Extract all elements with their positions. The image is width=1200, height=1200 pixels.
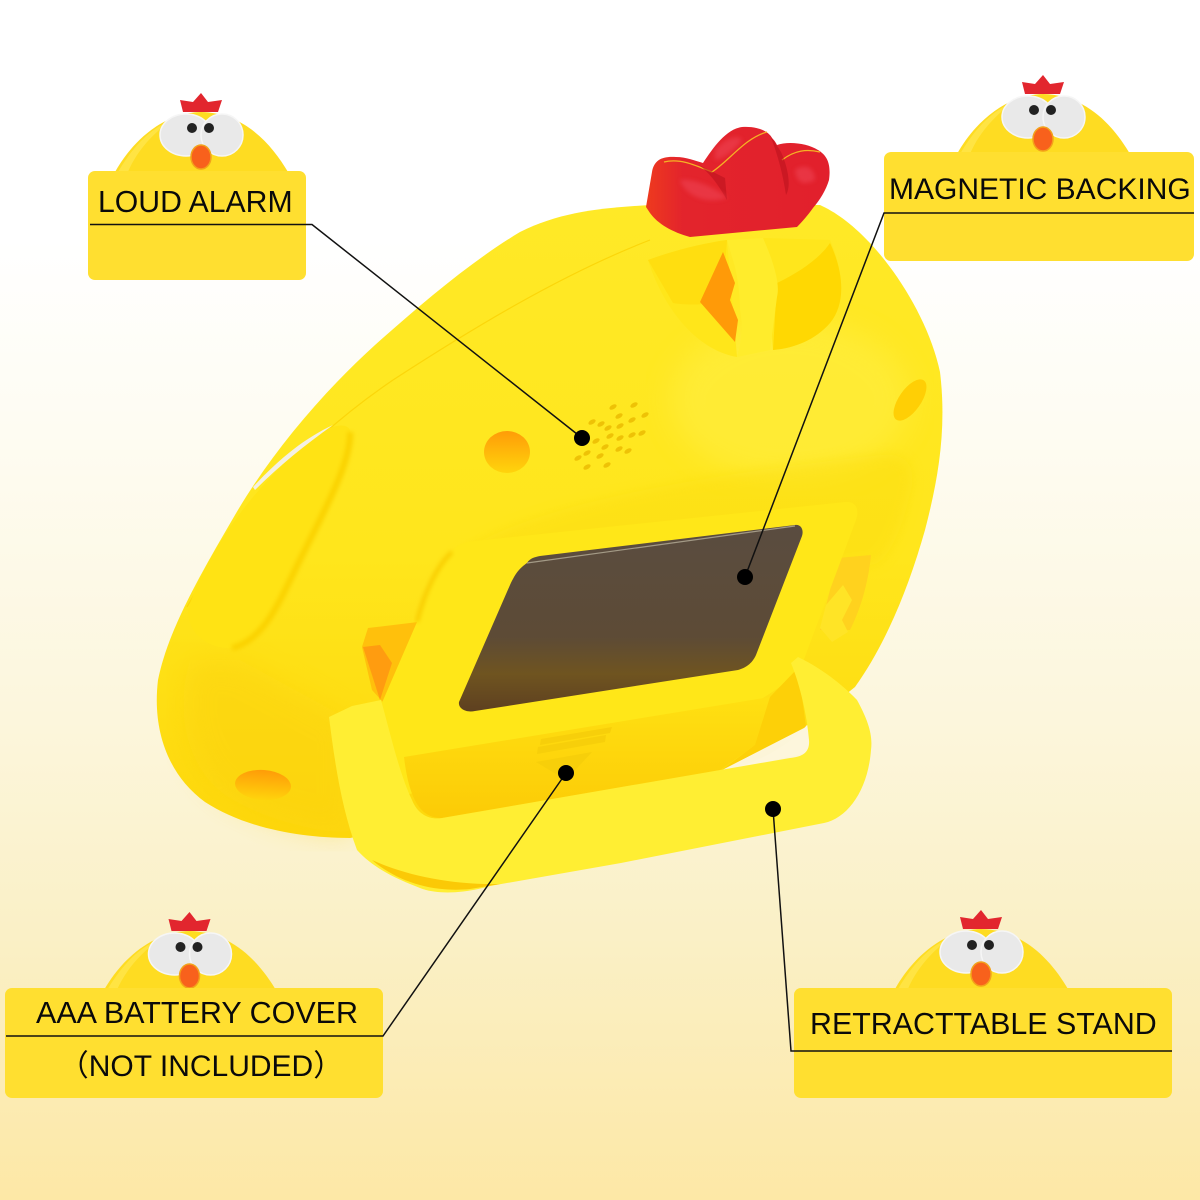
side wing <box>188 425 350 648</box>
panel: retractable stand <box>794 910 1172 1098</box>
hole: right <box>887 374 933 426</box>
callout: stand leader <box>765 801 1172 1051</box>
hole: left <box>484 431 530 473</box>
frame shadow <box>417 552 452 622</box>
panel: loud alarm <box>88 93 306 280</box>
magnet plate <box>459 525 803 711</box>
orange slot <box>700 252 738 342</box>
hinge pin right <box>820 585 852 642</box>
label box <box>5 988 383 1098</box>
orange notch <box>363 645 392 700</box>
body seam <box>187 240 650 607</box>
label text line one: AAA BATTERY COVER <box>36 996 358 1030</box>
callout: magnetic backing leader <box>737 213 1194 585</box>
speaker grille <box>573 401 650 471</box>
label text: RETRACTTABLE STAND <box>810 1007 1157 1041</box>
eye recess right deep part <box>773 243 841 350</box>
label box <box>88 171 306 280</box>
white wing sliver <box>253 425 333 490</box>
panel: battery cover <box>5 912 383 1098</box>
product: chicken timer back view <box>157 127 942 892</box>
orange gap left of frame <box>362 622 418 710</box>
timer body <box>157 205 942 838</box>
callout: loud alarm leader <box>90 224 590 446</box>
highlight: upper body <box>670 320 910 480</box>
hole: lower left <box>234 768 292 802</box>
center bridge of eye recess <box>727 238 778 357</box>
battery cover <box>404 697 770 818</box>
shading: lower body edge <box>183 660 350 834</box>
icon: chicken head <box>104 912 276 991</box>
label box <box>794 988 1172 1098</box>
label text line two: （NOT INCLUDED） <box>59 1050 343 1083</box>
comb creases <box>664 132 820 172</box>
icon: chicken head <box>115 93 288 172</box>
eye recess left upper facet <box>648 240 727 305</box>
callout: battery cover leader <box>6 765 574 1036</box>
panel: magnetic backing <box>884 75 1194 261</box>
magnet edge highlight <box>527 526 795 563</box>
right hinge gap <box>820 555 871 630</box>
red comb <box>646 127 830 237</box>
label box <box>884 152 1194 261</box>
eye recess right <box>763 238 841 350</box>
body below cover at right <box>722 668 806 770</box>
eye recess left <box>648 240 737 357</box>
white see-through gap <box>722 725 810 772</box>
label text: MAGNETIC BACKING <box>889 173 1191 206</box>
rear raised panel shadow <box>430 455 913 630</box>
stand lower shade <box>372 860 500 890</box>
icon: chicken head <box>957 75 1130 154</box>
icon: chicken head <box>895 910 1068 989</box>
label text: LOUD ALARM <box>98 186 293 219</box>
rear frame plate <box>381 502 857 795</box>
retractable stand <box>329 657 871 892</box>
cover arrow mark <box>536 727 612 780</box>
